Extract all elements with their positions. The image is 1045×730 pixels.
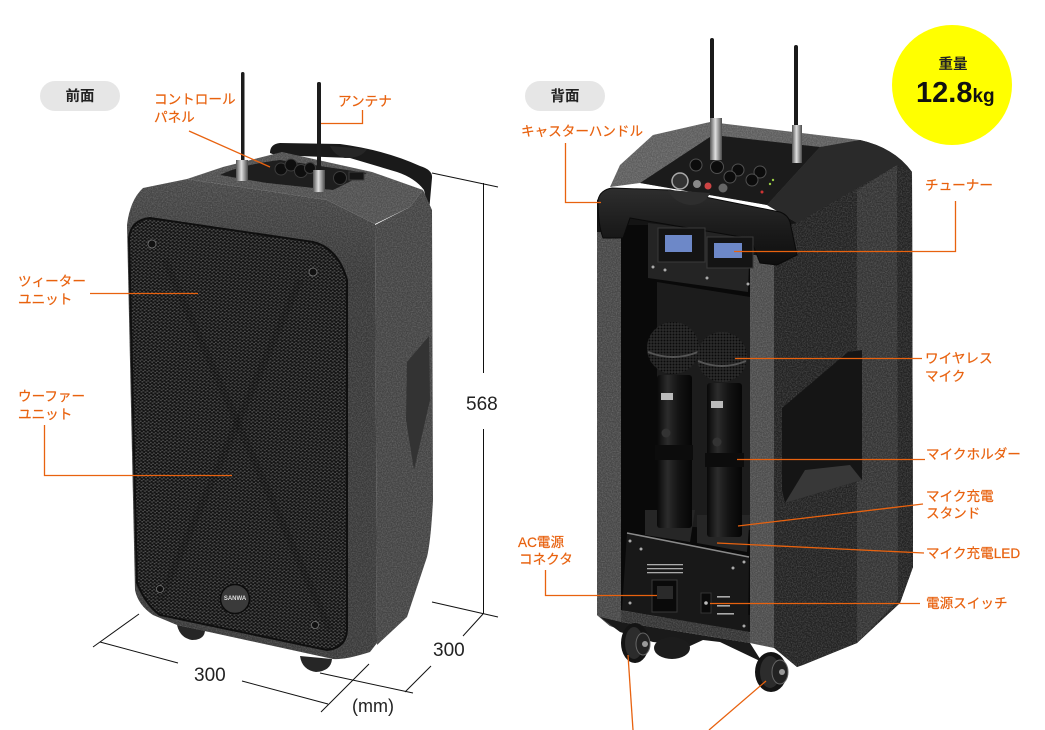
microphone 2	[697, 332, 747, 537]
callout: control panel: パネル	[154, 110, 195, 125]
front antenna left	[236, 72, 248, 181]
dimension: height 568: 568	[466, 394, 498, 415]
caster wheel left	[621, 623, 650, 663]
control knobs	[275, 159, 364, 184]
callout: mic charging stand	[738, 489, 994, 526]
callout: AC power connector: コネクタ	[519, 552, 573, 567]
unit label: (mm)	[352, 696, 394, 716]
weight badge	[892, 25, 1012, 145]
callout: mic charging stand: スタンド	[926, 506, 980, 521]
callout: power switch: 電源スイッチ	[926, 596, 1008, 611]
front label pill	[40, 81, 120, 111]
front label pill: 前面	[66, 87, 94, 105]
control panel	[640, 135, 820, 205]
rear body top shell	[610, 122, 897, 223]
SANWA logo badge: SANWA	[224, 596, 247, 602]
panel screws	[628, 540, 746, 628]
power switch	[701, 593, 734, 615]
weight badge: 12.8kg	[916, 77, 995, 109]
callout: mic charging LED: マイク充電LED	[926, 546, 1020, 561]
SANWA logo badge	[220, 584, 250, 614]
side recess	[406, 336, 430, 470]
dimension: depth 300	[320, 614, 483, 693]
callout: wireless mic	[735, 351, 993, 384]
side lighter band	[857, 165, 898, 643]
handle latch	[668, 190, 710, 205]
callout: tuner: チューナー	[925, 178, 993, 193]
rear label pill	[525, 81, 605, 111]
speaker grille	[129, 218, 347, 650]
callout: caster handle	[521, 124, 643, 202]
rear speaker product	[597, 38, 913, 692]
callout: antenna	[321, 94, 392, 124]
callout: mic holder: マイクホルダー	[926, 447, 1021, 462]
tuner mounting plate	[648, 223, 750, 292]
callout: wireless mic: ワイヤレス	[925, 351, 993, 366]
grille corner screws	[148, 240, 318, 628]
charging stands	[645, 510, 750, 552]
callout: mic charging LED	[717, 543, 1020, 561]
callout: AC power connector: AC電源	[518, 535, 564, 550]
tuner plate screws	[652, 266, 750, 286]
callout: woofer unit: ウーファー	[18, 389, 85, 404]
dimension: height 568	[432, 173, 498, 617]
side handle recess	[782, 350, 862, 503]
rear foot	[654, 637, 690, 659]
callout: tuner	[734, 178, 993, 252]
underside	[600, 617, 762, 662]
microphone 1	[647, 322, 699, 528]
callout: AC power connector	[518, 535, 657, 596]
front antenna right	[313, 82, 325, 192]
callout: tweeter unit: ツィーター	[18, 274, 86, 289]
left pillar	[597, 232, 621, 630]
callout: control panel: コントロール	[154, 92, 236, 107]
front speaker product	[127, 72, 433, 672]
side panel	[375, 190, 433, 645]
top deck	[187, 152, 423, 224]
callout: antenna: アンテナ	[338, 94, 392, 109]
front face bezel	[127, 179, 377, 659]
AC inlet	[652, 580, 677, 612]
callout: tweeter unit: ユニット	[18, 292, 72, 307]
right pillar	[750, 255, 774, 648]
rear opening interior	[621, 225, 751, 615]
rear mic panel	[657, 282, 750, 530]
rear antenna right	[792, 45, 802, 163]
carry handle	[270, 143, 432, 212]
callout: tweeter unit	[18, 274, 198, 307]
tuner unit 1	[658, 228, 705, 262]
dimension: width 300	[93, 614, 369, 712]
weight badge: 重量	[938, 56, 968, 73]
caster handle	[598, 188, 797, 265]
callout: woofer unit	[18, 389, 232, 476]
control knobs and connectors	[672, 159, 774, 194]
bottom frame	[621, 610, 750, 643]
rear label pill: 背面	[550, 87, 580, 105]
tuner unit 2	[707, 237, 753, 268]
rear silhouette backfill	[597, 140, 913, 667]
caster wheel right	[755, 652, 788, 692]
grille X shading	[160, 260, 330, 630]
callout: woofer unit: ユニット	[18, 407, 72, 422]
front feet	[177, 625, 332, 672]
callout: caster handle: キャスターハンドル	[521, 124, 643, 139]
dark right shoulder	[767, 140, 912, 223]
dimension: width 300: 300	[194, 665, 226, 686]
callout: mic charging stand: マイク充電	[926, 489, 994, 504]
control panel	[220, 160, 367, 190]
rear antenna left	[710, 38, 722, 160]
callout lines: casters	[628, 655, 766, 730]
rear side panel	[773, 163, 913, 667]
power panel	[622, 533, 749, 632]
callout: wireless mic: マイク	[925, 369, 966, 384]
callout: control panel	[154, 92, 270, 167]
dimension: depth 300: 300	[433, 640, 465, 661]
spec print	[647, 564, 683, 573]
